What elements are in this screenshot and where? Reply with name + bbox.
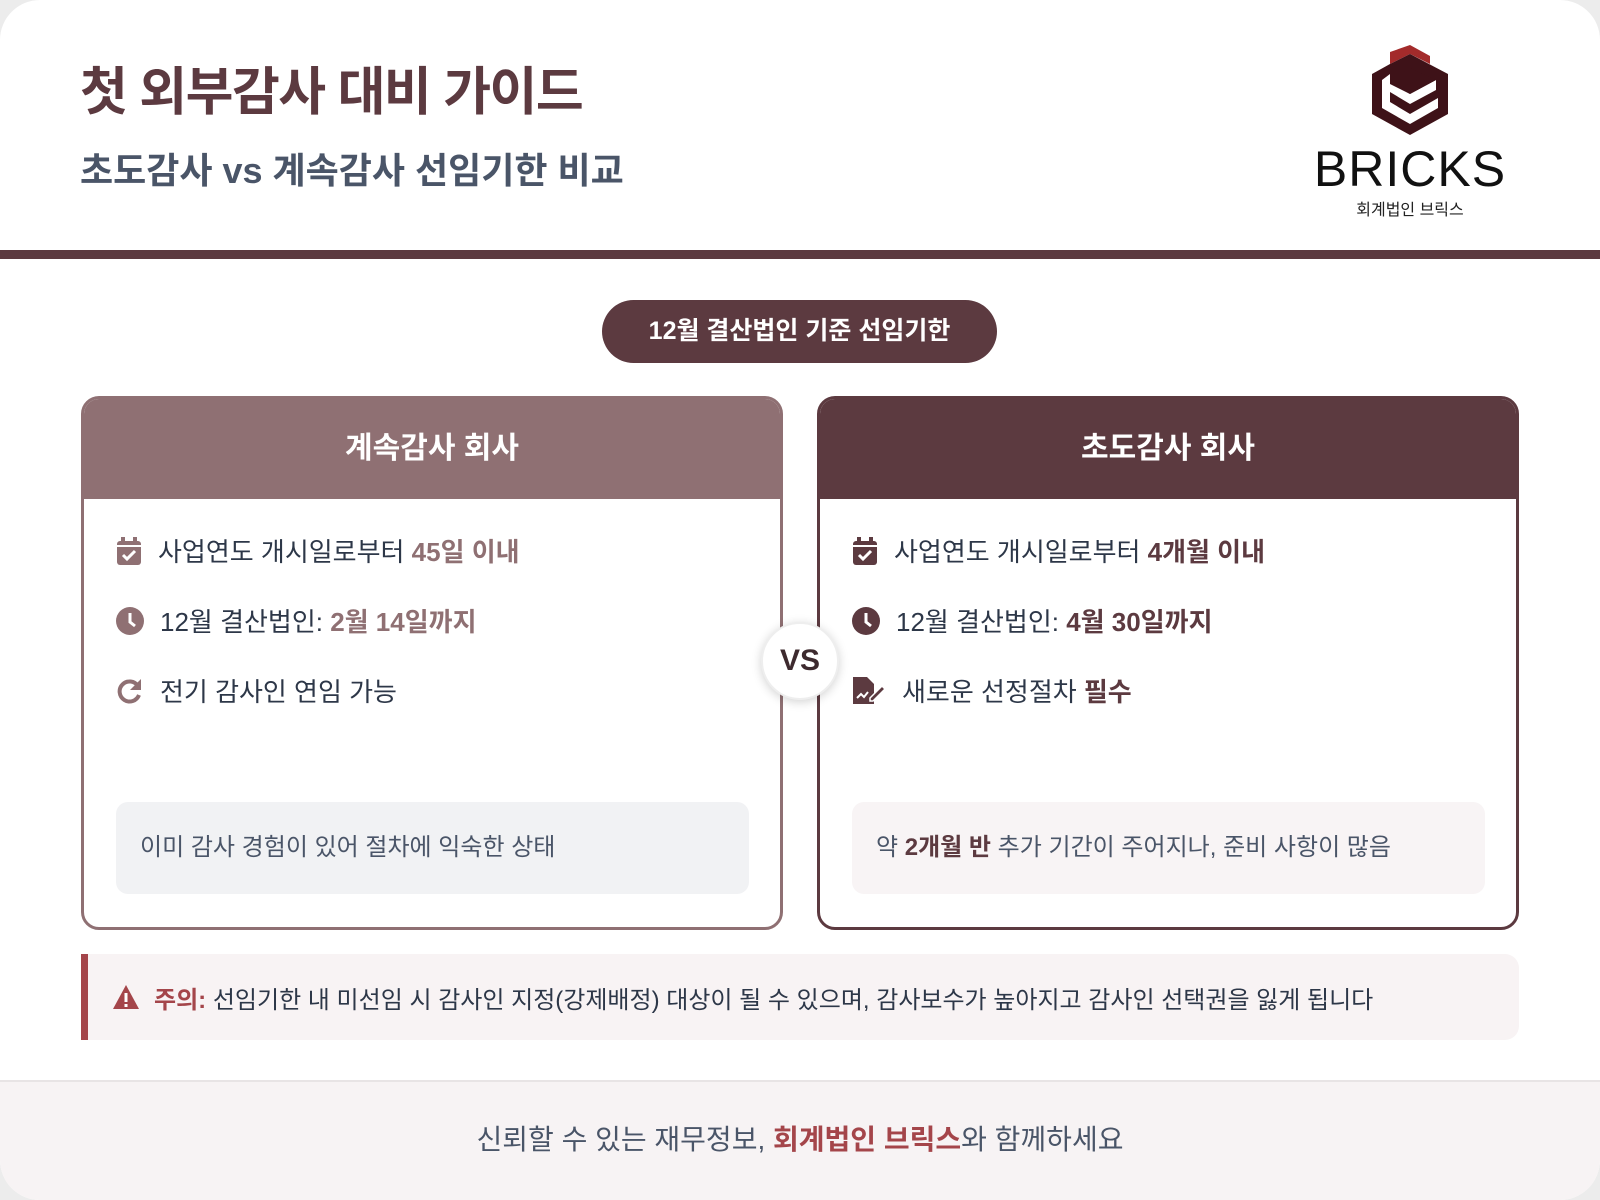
row: date: 12월 결산법인: 2월 14일까지 <box>160 607 476 637</box>
logo wordmark: BRICKS <box>1314 141 1506 197</box>
note <box>852 802 1485 894</box>
header: 초도감사 회사 <box>1081 432 1255 465</box>
vs badge <box>761 622 839 700</box>
header: 계속감사 회사 <box>345 432 519 465</box>
note: 약 2개월 반 추가 기간이 주어지나, 준비 사항이 많음 <box>876 834 1391 861</box>
subtitle: 초도감사 vs 계속감사 선임기한 비교 <box>80 150 624 191</box>
footer: 신뢰할 수 있는 재무정보, 회계법인 브릭스와 함께하세요 <box>477 1124 1123 1155</box>
row: selection: 새로운 선정절차 필수 <box>902 677 1132 707</box>
note: 이미 감사 경험이 있어 절차에 익숙한 상태 <box>140 834 555 861</box>
vs badge: VS <box>780 644 820 677</box>
logo subtext: 회계법인 브릭스 <box>1356 202 1464 219</box>
pill badge: 12월 결산법인 기준 선임기한 <box>649 317 950 345</box>
header <box>820 399 1516 499</box>
panel: 계속감사 <box>81 396 783 930</box>
footer <box>0 1080 1600 1200</box>
title: 첫 외부감사 대비 가이드 <box>80 64 582 122</box>
warning callout <box>81 954 1519 1040</box>
icon: bricks hexagon <box>1372 45 1448 135</box>
note <box>116 802 749 894</box>
logo <box>1314 45 1506 219</box>
row: reappoint: 전기 감사인 연임 가능 <box>160 677 397 707</box>
header <box>84 399 780 499</box>
panel: 초도감사 <box>817 396 1519 930</box>
pill badge <box>602 300 997 363</box>
icon: warning <box>113 985 139 1009</box>
warning callout: 주의: 선임기한 내 미선임 시 감사인 지정(강제배정) 대상이 될 수 있으며, 감사보수가 높아지고 감사인 선택권을 잃게 됩니다 <box>154 986 1373 1014</box>
row: deadline: 사업연도 개시일로부터 45일 이내 <box>158 537 520 567</box>
row: date: 12월 결산법인: 4월 30일까지 <box>896 607 1212 637</box>
row: deadline: 사업연도 개시일로부터 4개월 이내 <box>894 537 1265 567</box>
